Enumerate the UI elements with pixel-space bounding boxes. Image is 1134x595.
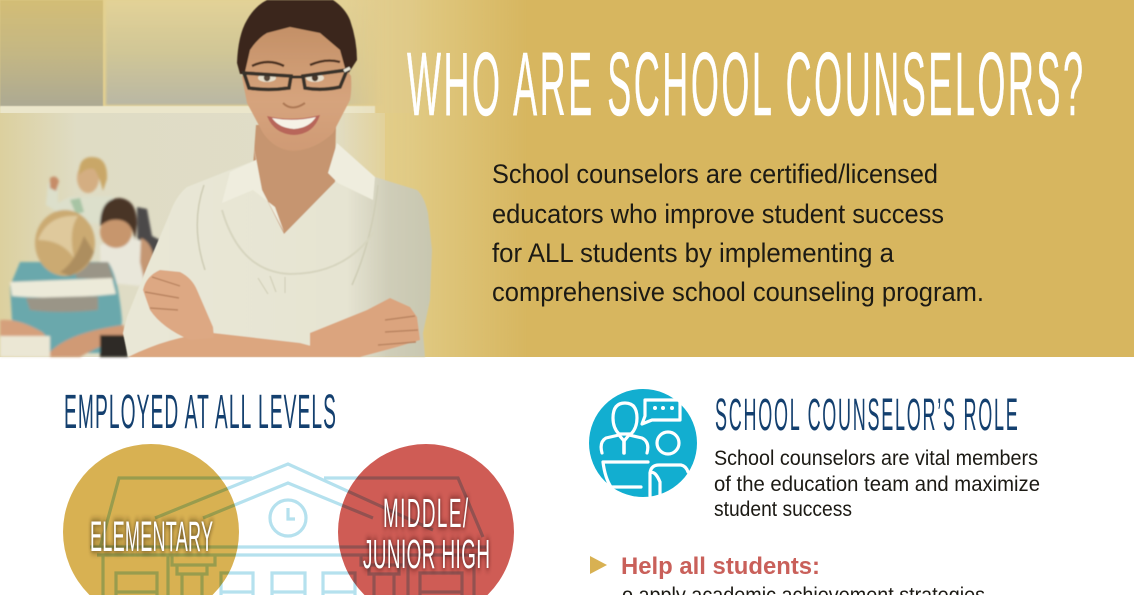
header band [0, 0, 1134, 357]
intro text: for ALL students by implementing a [492, 238, 895, 268]
icon: counselor with student [589, 389, 697, 497]
intro text: School counselors are certified/licensed [492, 159, 938, 189]
intro text: comprehensive school counseling program. [492, 277, 984, 307]
label: elementary: ELEMENTARY [90, 512, 213, 560]
label: middle junior high: JUNIOR HIGH [363, 531, 490, 577]
sleeve seam [197, 185, 378, 285]
label: middle junior high: MIDDLE/ [383, 490, 468, 536]
heading: employed at all levels: EMPLOYED AT ALL LEVELS [64, 385, 336, 439]
face [242, 27, 351, 151]
student body [650, 465, 688, 496]
lips and teeth [267, 115, 320, 135]
back student [46, 178, 118, 225]
circle: middle junior high [338, 444, 514, 595]
role description: student success [714, 498, 852, 521]
brows [252, 61, 340, 66]
heading: school counselor's role: SCHOOL COUNSELOR’S ROLE [715, 391, 1018, 441]
levels diagram [63, 444, 514, 595]
counselor shoulders [601, 435, 648, 453]
collar [222, 143, 284, 232]
intro text [492, 159, 984, 307]
bullet arrow [590, 556, 607, 574]
label: elementary: ELEMENTARY [90, 512, 213, 560]
role description [714, 447, 1040, 521]
title: WHO ARE SCHOOL COUNSELORS? [407, 34, 1083, 135]
counselor head [613, 403, 637, 434]
neck [252, 125, 340, 236]
middle student [137, 207, 160, 275]
speech bubble [642, 400, 680, 424]
circle: elementary [63, 444, 239, 595]
students [0, 157, 160, 357]
role description: School counselors are vital members [714, 447, 1038, 470]
label: middle junior high: MIDDLE/ [383, 490, 468, 536]
laptop [603, 462, 648, 487]
label: middle junior high [363, 490, 490, 577]
intro text: educators who improve student success [492, 199, 944, 229]
nose [283, 103, 305, 108]
bullet heading: help all students: Help all students: [621, 553, 820, 580]
role description: of the education team and maximize [714, 473, 1040, 496]
neckline gather [222, 210, 374, 274]
right hand and forearm [310, 298, 420, 357]
student head [657, 432, 679, 454]
icon: school building [90, 464, 486, 595]
lower arm skin [128, 333, 352, 357]
label: middle junior high: JUNIOR HIGH [363, 531, 490, 577]
hair [237, 0, 357, 74]
glasses [244, 68, 350, 90]
left sleeve cuff [123, 295, 168, 356]
teacher [123, 0, 432, 357]
photo: classroom wall [0, 0, 540, 357]
front student [10, 262, 122, 353]
shirt [123, 150, 432, 357]
left hand [143, 270, 214, 340]
